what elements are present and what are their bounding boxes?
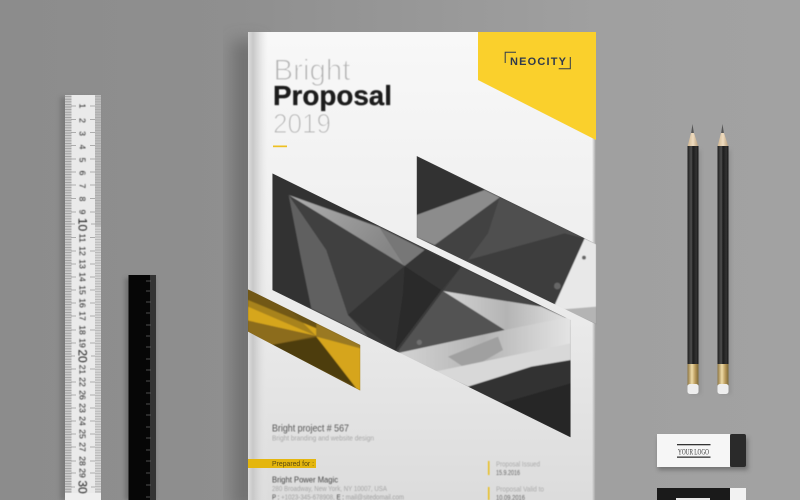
ruler numbers: 17 [78, 311, 88, 321]
ruler numbers: 20 [76, 349, 90, 363]
ruler numbers: 30 [76, 480, 90, 494]
ruler numbers: 14 [78, 272, 88, 282]
proposal issued date: Proposal Issued [496, 462, 540, 468]
logo: NEOCITY [505, 52, 570, 69]
ruler numbers: 16 [78, 298, 88, 308]
project text block: Bright branding and website design [272, 434, 374, 443]
yellow corner [478, 32, 596, 140]
ruler numbers: 29 [78, 468, 88, 478]
ruler numbers: 28 [78, 456, 88, 466]
proposal issued date [488, 461, 540, 477]
ruler numbers: 21 [78, 365, 88, 374]
ruler numbers: 19 [78, 338, 88, 348]
prepared for label: Prepared for : [272, 459, 314, 468]
ruler numbers: 11 [78, 234, 88, 243]
title: Bright [274, 54, 351, 87]
ruler numbers: 12 [78, 246, 88, 256]
client details: 280 Broadway, New York, NY 10007, USA [272, 486, 387, 493]
title: 2019 [273, 108, 331, 139]
ruler numbers: 22 [78, 377, 88, 387]
book shadow [232, 40, 262, 500]
ruler numbers: 23 [78, 403, 88, 413]
ruler: black ruler [125, 275, 156, 500]
ruler numbers: 10 [76, 218, 90, 231]
ruler numbers: 25 [78, 429, 88, 439]
client details [272, 476, 404, 500]
accent dash [273, 146, 287, 147]
ruler numbers: 9 [78, 210, 88, 215]
ruler: white steel ruler [60, 95, 101, 500]
logo: NEOCITY: NEOCITY [510, 56, 567, 68]
ruler numbers: 24 [78, 416, 88, 426]
proposal valid date: Proposal Valid to [496, 486, 544, 494]
ruler numbers: 3 [78, 131, 88, 136]
eraser: black [657, 488, 746, 500]
ruler numbers: 15 [78, 285, 88, 295]
ruler numbers: 4 [78, 145, 88, 150]
project text block [272, 422, 374, 443]
project text block: Bright project # 567 [272, 422, 349, 434]
ruler numbers: 2 [78, 118, 88, 123]
ruler numbers [76, 104, 90, 494]
title [273, 54, 392, 139]
ruler numbers: 18 [78, 325, 88, 335]
yellow geometric photo panel [246, 287, 363, 393]
proposal issued date: 15.9.2016 [496, 470, 520, 477]
pencil: right [718, 124, 731, 394]
proposal valid date [488, 486, 544, 500]
ruler numbers: 13 [78, 259, 88, 269]
ruler numbers: 26 [78, 390, 88, 400]
eraser: white with logo [657, 434, 748, 470]
title: Proposal [273, 80, 392, 111]
eraser logo text: YOUR LOGO [678, 446, 709, 456]
top right geometric photo panel [415, 153, 601, 327]
ruler numbers: 1 [78, 104, 88, 109]
ruler numbers: 27 [78, 442, 88, 452]
prepared for label [248, 459, 316, 468]
ruler numbers: 8 [78, 197, 88, 202]
ruler numbers: 5 [78, 158, 88, 163]
ruler numbers: 7 [78, 184, 88, 189]
brochure cover [246, 32, 601, 500]
main geometric photo panel [268, 170, 575, 440]
ruler numbers: 6 [78, 171, 88, 176]
client details: Bright Power Magic [272, 476, 338, 484]
pencil: left [688, 124, 701, 394]
